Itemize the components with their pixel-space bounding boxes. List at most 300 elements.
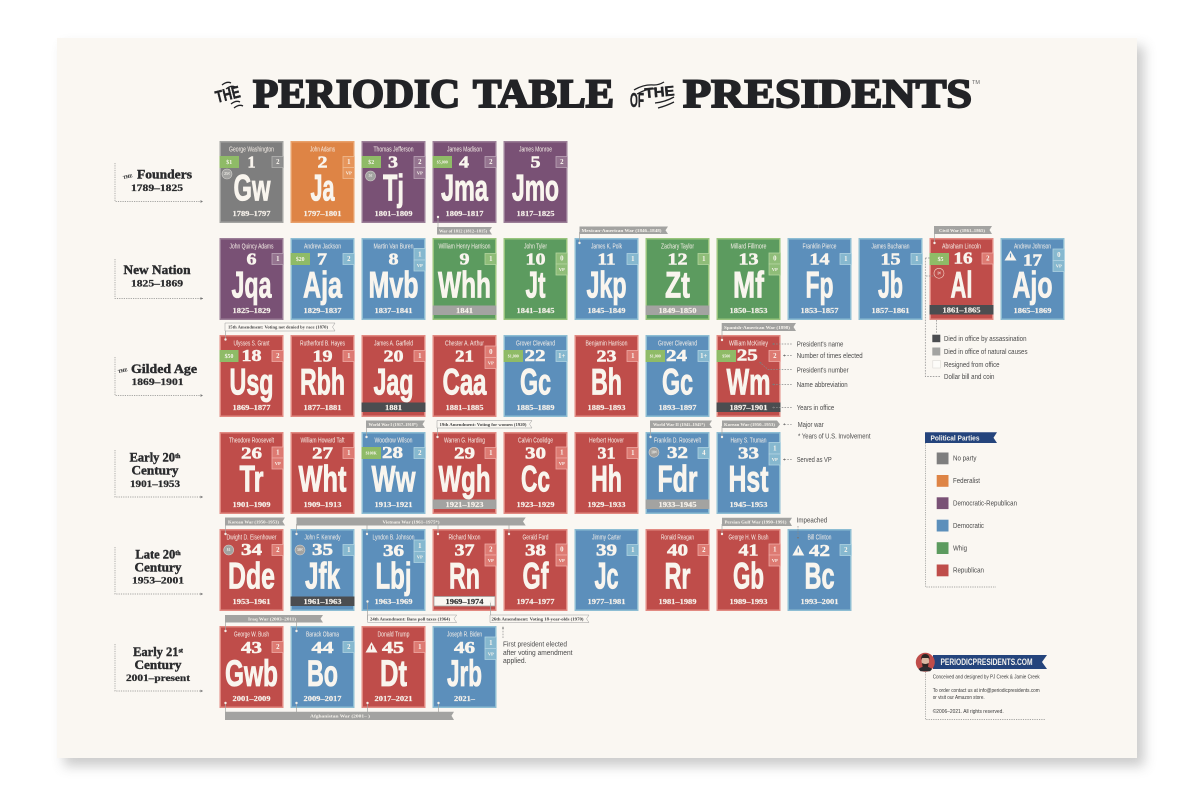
war tag: Afghanistan War [224,702,454,720]
symbol: Aja [303,264,342,306]
title [213,71,980,116]
war tag: Korean War: Korean War (1950–1953) [228,519,279,524]
number: 4 [459,152,470,172]
terms [1053,249,1064,272]
war tag: Iraq War [224,615,323,632]
terms: VP [275,461,281,466]
name: Abraham Lincoln [942,244,981,250]
card: Thomas Jefferson [362,142,426,222]
name: James Buchanan [872,244,910,250]
callout: first president after amendment: after voting amendment [503,650,573,657]
swatch: democratic-republican [937,497,1017,509]
terms: 1+ [558,353,566,360]
card: Joseph R. Biden [433,627,496,707]
name: Zachary Taylor [661,244,694,250]
swatch: no party [937,452,977,464]
icon: Lincoln portrait [916,653,935,672]
card: Theodore Roosevelt [220,433,284,513]
name: Martin Van Buren [374,244,414,250]
card: Andrew Johnson [1001,239,1064,319]
terms: VP [559,267,565,272]
era label: early 21st century: 2001–present [126,674,191,684]
era label: founders [115,163,203,202]
symbol: Caa [442,362,487,402]
legend: cause of leaving office: Died in office by assassination [944,336,1027,343]
symbol: Bo [307,653,338,694]
symbol: Bc [804,556,834,596]
card: Grover Cleveland (22) [504,336,568,416]
terms [769,442,780,465]
symbol: Bh [591,362,622,402]
card: James Madison [432,142,496,222]
era label: late 20th century [115,547,203,594]
card: Franklin D. Roosevelt [646,433,710,513]
terms: 1 [702,256,706,263]
card: Harry S. Truman [717,433,780,513]
coin: $1 [227,548,231,552]
symbol: Rbh [300,362,345,402]
terms: 1 [489,640,493,647]
terms: 2 [276,159,280,166]
name: Bill Clinton [808,534,832,542]
terms: 1+ [700,353,708,360]
years: 1961–1963 [304,598,342,606]
icon: impeached [792,545,804,556]
card: William McKinley [716,336,780,416]
name: Gerald Ford [522,534,549,542]
amendment tag: 15th [224,323,335,341]
terms: 1 [347,547,351,554]
card: Andrew Jackson [290,239,354,319]
swatch: whig [937,542,967,554]
symbol: Al [950,264,972,306]
dollar: $1,000 [650,354,661,358]
terms [414,540,426,562]
callout: president's name: President's name [797,342,843,348]
terms: 2 [489,547,493,554]
terms: 2 [347,256,351,263]
terms: 2 [773,353,777,360]
coin: 10¢ [651,450,657,454]
number: 24 [666,346,688,365]
terms: 1 [773,446,777,452]
card: George W. Bush [220,627,284,707]
war tag: Spanish-American War [721,323,796,341]
name: Benjamin Harrison [586,340,628,348]
name: Thomas Jefferson [374,146,414,154]
symbol: Lbj [376,556,412,596]
number: 38 [525,540,546,560]
callout: number of times elected: Number of times elected [797,353,863,360]
year bar [432,306,496,315]
terms: VP [772,267,778,272]
card: Gerald Ford [504,530,568,610]
year bar [434,596,495,606]
card: Ulysses S. Grant [220,336,284,416]
amendment tag: 26th [489,600,589,622]
terms: 2 [489,159,493,166]
number: 15 [880,250,900,268]
symbol: Jrb [447,653,482,694]
years: 1913–1921 [374,501,413,509]
dollar: $100K [366,450,378,456]
callout: first president after amendment: applied. [503,658,527,665]
war tag: War of 1812 [437,216,492,234]
symbol: Hst [728,458,768,500]
callout: name abbreviation [772,382,848,389]
callout: president's number: President's number [797,368,849,374]
note: years of involvement: * Years of U.S. Involvement [798,434,871,440]
terms: 1 [347,450,351,457]
card: Woodrow Wilson [362,433,426,513]
number: 33 [738,444,759,462]
name: George H. W. Bush [728,534,769,542]
terms: 1 [418,252,422,258]
title ornament: of the [630,82,675,112]
terms [769,544,780,566]
years: 1929–1933 [588,501,626,509]
legend: cause of leaving office [925,258,1028,381]
credit line: Conceived and designed by PJ Creek & Jamie Creek [933,674,1040,680]
number: 46 [454,638,475,657]
number: 6 [246,250,256,268]
number: 23 [596,346,616,366]
era label: gilded age: Gilded Age [131,362,197,376]
card: Bill Clinton [788,530,852,610]
terms: 0 [773,256,777,263]
card: Millard Fillmore [717,239,780,319]
years: 1923–1929 [516,501,555,509]
war tag: Mexican-American War [578,226,668,244]
number: 10 [526,250,546,268]
terms: 1 [276,256,280,263]
symbol: Ajo [1012,264,1052,306]
name: Donald Trump [378,632,410,638]
symbol: Fdr [658,458,698,500]
years: 1850–1853 [730,307,768,315]
card: Benjamin Harrison [575,336,638,416]
amendment tag: 26th: 26th Amendment: Voting 18-year-olds (1970) [492,616,584,621]
name: Warren G. Harding [444,438,485,444]
year bar [290,596,354,606]
terms: 2 [276,353,280,360]
number: 39 [596,540,617,560]
terms: 0 [560,256,564,263]
years: 1881 [385,404,402,412]
name: Woodrow Wilson [374,438,413,444]
years: 1837–1841 [374,307,413,315]
years: 1865–1869 [1014,307,1052,315]
terms: VP [488,558,494,563]
terms: 1 [631,256,635,263]
dollar: $5,000 [437,160,448,164]
number: 26 [241,444,262,462]
number: 42 [809,541,830,560]
symbol: Dde [228,556,275,596]
terms: VP [417,263,423,268]
years: 2021– [454,695,475,703]
terms: VP [417,554,423,560]
terms: 0 [489,349,493,356]
name: Rutherford B. Hayes [300,340,345,348]
years: 1921–1923 [446,501,484,509]
terms [414,156,426,178]
terms: 2 [418,450,422,457]
terms: VP [772,457,778,462]
symbol: Gc [662,362,693,402]
terms: VP [772,558,778,563]
era label: new nation [115,259,203,298]
symbol: Jb [878,264,903,306]
symbol: Jag [374,362,414,402]
card: Martin Van Buren [362,239,426,319]
terms: 4 [702,450,706,457]
name: Dwight D. Eisenhower [226,534,277,542]
years: 1825–1829 [232,307,271,315]
years: 1849–1850 [658,307,697,315]
years: 1909–1913 [304,501,342,509]
terms [485,637,496,660]
era label: late 20th century: 1953–2001 [132,576,184,586]
terms: 1 [631,450,635,457]
title ornament: of the: OF [630,90,644,112]
terms: 1 [418,353,422,360]
dollar: $20 [296,256,305,263]
era label: new nation: New Nation [124,263,191,277]
terms: 1 [915,256,919,263]
title word: periodic: PERIODIC [253,71,460,116]
terms: VP [346,170,352,176]
war tag: Korean War (legend): Korean War (1950–1953) [724,422,775,427]
card: George H. W. Bush [717,530,780,610]
callout: years in office: Years in office [797,405,834,412]
year bar [432,500,496,509]
number: 27 [312,444,334,462]
name: George W. Bush [234,632,269,638]
callout: impeached: Impeached [797,518,827,524]
war tag: Vietnam War: Vietnam War (1961–1975*) [382,519,440,524]
year bar [930,305,994,314]
callout: first president after amendment [503,626,573,665]
symbol: Cc [521,458,550,500]
callout: impeached [797,518,827,539]
era label: gilded age: THE [118,367,128,374]
symbol: Wht [298,458,346,500]
years: 1963–1969 [374,598,413,606]
title ornament: the: THE [213,82,242,107]
credits: or visit our Amazon store. [933,695,985,701]
amendment tag: 15th: 15th Amendment: Voting not denied by race (1870) [228,325,328,330]
dollar: $1,000 [508,354,519,358]
swatch: federalist: Federalist [953,478,980,485]
symbol: Gwb [225,653,278,694]
swatch: democratic-republican: Democratic-Republican [953,500,1017,508]
terms: VP [488,360,494,366]
name: James K. Polk [591,244,622,250]
terms: 2 [276,547,280,554]
name: Andrew Jackson [304,244,341,250]
number: 14 [810,250,830,268]
era label: late 20th century: th [175,551,181,557]
war tag: Spanish-American War: Spanish-American War (1898) [724,325,791,330]
number: 25 [737,346,758,364]
trademark: TM [972,80,980,86]
callout: major war: Major war [798,422,824,429]
terms: VP [559,558,565,563]
number: 12 [668,250,688,268]
years: 1809–1817 [446,210,484,218]
number: 18 [242,346,262,365]
number: 16 [954,248,972,268]
terms: VP [1056,264,1062,268]
symbol: Dt [380,653,407,694]
terms: 1 [347,159,351,166]
years: 1981–1989 [658,598,697,606]
terms: 2 [844,547,848,554]
years: 1853–1857 [800,307,839,315]
symbol: Jc [594,556,618,596]
card: Grover Cleveland (24) [646,336,710,416]
legend heading: Political Parties [930,433,980,442]
card: James K. Polk [575,239,638,319]
years: 1841–1845 [516,307,555,315]
name: Theodore Roosevelt [229,438,274,444]
card: James Monroe [504,142,568,222]
name: John F. Kennedy [304,534,341,542]
terms: 1 [347,353,351,360]
number: 11 [598,250,616,268]
year bar [646,306,710,315]
era label: founders: Founders [137,168,192,182]
name: James Madison [447,146,482,154]
name: John Tyler [524,244,547,250]
terms: 0 [560,547,564,554]
terms: 0 [1057,252,1061,259]
card: Lyndon B. Johnson [362,530,426,610]
war tag: World War II [649,420,712,438]
era label: early 20th century: 1901–1953 [130,480,180,490]
years: 1993–2001 [800,598,839,606]
years: 1889–1893 [588,404,626,412]
name: Harry S. Truman [730,438,767,444]
war tag: War of 1812: War of 1812 (1812–1815) [439,228,487,233]
swatch: whig: Whig [953,546,967,552]
symbol: Rn [449,556,480,596]
swatch: federalist [937,475,980,487]
card: John Tyler [504,239,568,319]
symbol: Ja [310,168,335,208]
card: James A. Garfield [362,336,426,416]
era label: late 20th century: Late 20 [135,548,175,562]
number: 44 [312,638,334,657]
war tag: Persian Gulf War: Persian Gulf War (1990–1991) [724,520,787,524]
years: 1797–1801 [304,210,342,218]
card: James Buchanan [859,239,922,319]
terms [485,346,496,368]
number: 45 [382,638,404,657]
years: 1857–1861 [872,307,910,315]
swatch: democratic: Democratic [953,523,984,530]
number: 29 [454,444,475,462]
terms: 1 [631,353,635,360]
name: Grover Cleveland [658,340,697,348]
name: Millard Fillmore [730,244,767,250]
years: 1885–1889 [516,404,555,412]
callout: president's number [760,362,849,374]
callout: major war [783,422,824,429]
card: Jimmy Carter [575,530,638,610]
terms: 1 [773,547,777,554]
name: Franklin Pierce [802,244,837,250]
symbol: Wm [726,362,770,402]
terms: 1 [418,543,422,550]
dollar: $2 [368,159,374,166]
dollar: $5 [938,256,944,263]
coin: 5¢ [369,174,372,178]
name: Richard Nixon [448,534,481,542]
year bar [362,402,426,412]
callout: served as VP [783,457,832,464]
number: 30 [525,444,546,462]
terms [414,248,426,271]
name: Franklin D. Roosevelt [654,438,701,444]
symbol: Whh [438,264,491,306]
symbol: Jma [441,168,488,208]
years: 1789–1797 [232,210,271,218]
era label: early 21st century: Century [134,658,182,672]
dollar: $50 [225,353,233,360]
legend: political parties [925,432,1017,587]
symbol: Jt [526,264,546,306]
website banner: PERIODICPRESIDENTS.COM [940,657,1032,667]
terms: 2 [702,547,706,554]
years: 1801–1809 [374,210,413,218]
terms [556,447,568,469]
name: Chester A. Arthur [445,340,484,348]
symbol: Mf [733,264,764,306]
number: 34 [241,540,263,559]
number: 21 [455,346,474,366]
symbol: Tj [383,168,404,208]
symbol: Hh [591,458,622,500]
years: 1974–1977 [516,598,555,606]
icon: impeached [366,642,378,652]
era label: early 20th century: Early 20 [130,450,175,464]
war tag: Iraq War: Iraq War (2003–2011) [248,616,297,621]
card: Ronald Reagan [646,530,710,610]
card: Rutherford B. Hayes [291,336,354,416]
coin: 1¢ [937,272,941,276]
era label: early 21st century [115,644,203,691]
years: 1817–1825 [516,210,555,218]
title word: presidents: PRESIDENTS [683,71,972,116]
terms: 1 [560,450,564,457]
name: John Quincy Adams [230,244,274,250]
number: 22 [524,346,546,365]
amendment tag: 19th: 19th Amendment: Voting for women (1920) [440,422,527,427]
terms: 1 [844,256,848,263]
name: Lyndon B. Johnson [372,534,415,542]
number: 3 [388,152,398,172]
years: 1829–1837 [304,307,342,315]
card: John F. Kennedy [290,530,354,610]
name: Herbert Hoover [589,438,624,444]
symbol: Zt [665,264,690,306]
name: Ronald Reagan [661,534,694,542]
name: Calvin Coolidge [518,438,553,444]
years: 1901–1909 [232,501,271,509]
card: Chester A. Arthur [433,336,496,416]
